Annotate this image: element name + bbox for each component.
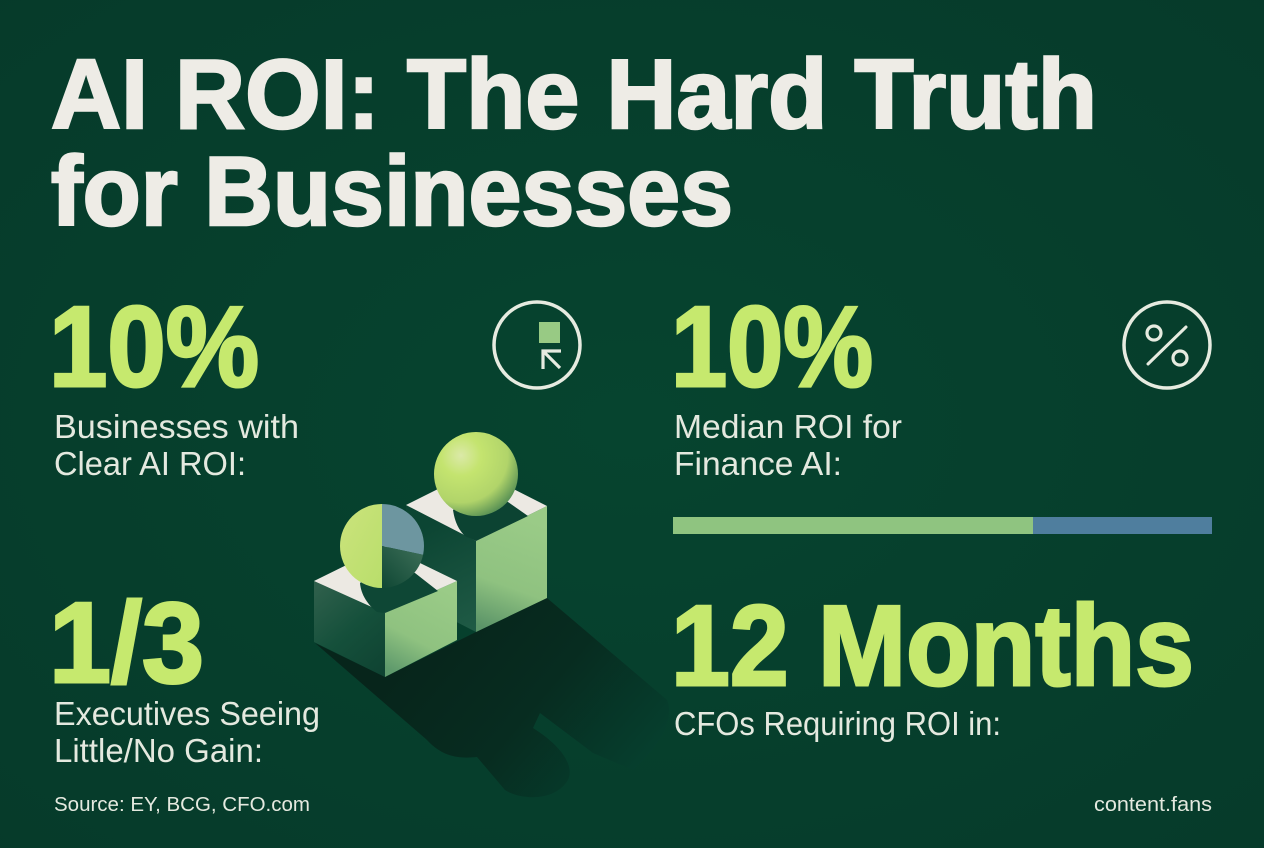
brand: content.fans xyxy=(1094,794,1212,816)
stat: businesses with clear AI ROI: Clear AI ROI: xyxy=(54,445,246,482)
left cube xyxy=(314,546,457,677)
stat: executives seeing little or no gain: Little/No Gain: xyxy=(54,732,263,769)
stat: businesses with clear AI ROI xyxy=(49,284,299,482)
icon: percent in circle xyxy=(1124,302,1210,388)
title xyxy=(51,39,1097,246)
stat: median ROI for finance AI xyxy=(671,284,902,482)
stat: executives seeing little or no gain: 1/3 xyxy=(49,580,204,707)
stat: executives seeing little or no gain xyxy=(49,580,320,769)
stat: median ROI for finance AI: Median ROI for xyxy=(674,408,902,445)
source: Source: EY, BCG, CFO.com xyxy=(54,794,310,816)
large sphere xyxy=(434,432,518,516)
right cube xyxy=(406,470,547,632)
stat: median ROI for finance AI: 10% xyxy=(671,284,873,411)
stat: businesses with clear AI ROI: Businesses with xyxy=(54,408,299,445)
icon: square and arrow in circle xyxy=(494,302,580,388)
stat: businesses with clear AI ROI: 10% xyxy=(49,284,259,411)
stat: CFOs requiring ROI: CFOs Requiring ROI in: xyxy=(674,705,1001,742)
stat: executives seeing little or no gain: Executives Seeing xyxy=(54,695,320,732)
progress bar xyxy=(673,517,1212,534)
stat: CFOs requiring ROI: 12 Months xyxy=(671,583,1194,710)
cast shadow xyxy=(315,598,669,797)
illustration: isometric cubes and spheres xyxy=(314,432,669,797)
pie sphere xyxy=(340,504,424,588)
title: AI ROI: The Hard Truth xyxy=(51,39,1097,149)
stat: median ROI for finance AI: Finance AI: xyxy=(674,445,842,482)
title: for Businesses xyxy=(51,136,733,246)
